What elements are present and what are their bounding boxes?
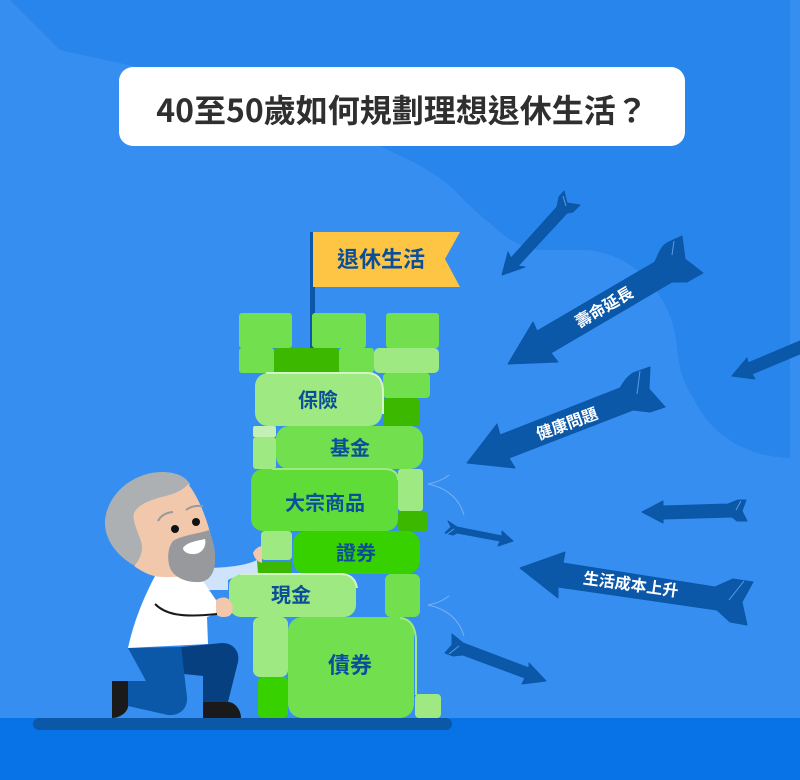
arm line [155, 604, 217, 616]
block: 大宗商品: 大宗商品 [285, 487, 365, 516]
beard [168, 530, 215, 582]
front hand [216, 597, 233, 617]
arrow: right middle [642, 500, 747, 523]
block: 證券 [293, 531, 420, 574]
arrow: 壽命延長: 壽命延長 [570, 279, 637, 333]
block: 證券: 證券 [336, 537, 376, 566]
head hair [105, 472, 190, 565]
flag: 退休生活: 退休生活 [337, 242, 425, 274]
block: 保險: 保險 [298, 384, 338, 413]
face [134, 484, 213, 577]
impact lines lower [428, 596, 464, 636]
arrow: 生活成本上升 [520, 552, 753, 625]
arrow: 壽命延長 [508, 236, 703, 364]
ground [0, 718, 800, 780]
block: 債券: 債券 [328, 648, 372, 680]
block: 基金 [276, 426, 423, 469]
mouth [183, 539, 205, 554]
arrow: right edge [732, 341, 800, 379]
block: 現金 [229, 574, 357, 617]
arrow: 生活成本上升: 生活成本上升 [582, 565, 680, 602]
right strip [790, 0, 800, 458]
eyebrows [158, 512, 173, 521]
trousers [181, 643, 238, 702]
impact lines upper [428, 475, 464, 515]
title card: 40至50歲如何規劃理想退休生活？ [156, 86, 648, 132]
character: kneeling old man [105, 472, 262, 718]
block: 基金: 基金 [330, 432, 370, 461]
title card [119, 67, 685, 146]
eyes [171, 525, 179, 533]
torso [128, 574, 216, 648]
block: 保險 [255, 373, 383, 426]
tower of blocks [229, 313, 441, 718]
block: 大宗商品 [251, 469, 398, 531]
arrow: 健康問題 [467, 367, 665, 468]
arrow: deflected lower [445, 634, 546, 684]
arrow: deflected upper [445, 521, 513, 546]
arrow: 健康問題: 健康問題 [532, 400, 601, 445]
block: 債券 [288, 617, 416, 718]
block: 現金: 現金 [271, 579, 311, 608]
arrow: top small [502, 191, 580, 275]
flag: 退休生活 [310, 232, 460, 349]
shoes [112, 681, 128, 718]
back arm [203, 560, 258, 590]
